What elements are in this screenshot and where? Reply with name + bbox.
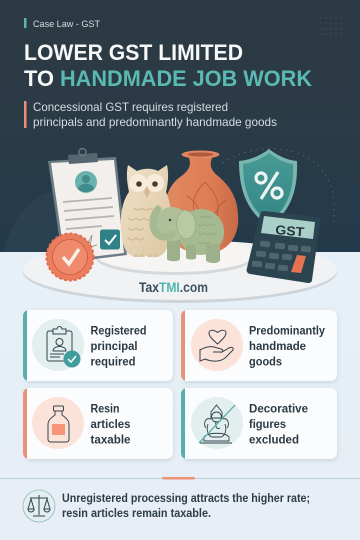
footer divider bbox=[0, 477, 360, 480]
background: dark header bbox=[0, 0, 360, 253]
dotted arc around shield bbox=[223, 149, 334, 225]
card: registered principal: required bbox=[90, 354, 136, 368]
platform upper tier bbox=[96, 238, 254, 275]
card: resin articles taxable bbox=[23, 388, 173, 459]
card: resin articles taxable: taxable bbox=[90, 432, 131, 446]
illustration: clipboard bbox=[48, 148, 127, 263]
card: predominantly handmade goods: Predominantly bbox=[249, 324, 325, 338]
footer takeaway text: Unregistered processing attracts the higher rate; bbox=[62, 491, 310, 505]
title: HANDMADE JOB WORK bbox=[60, 66, 313, 91]
card: predominantly handmade goods: handmade bbox=[249, 339, 306, 353]
icon: clipboard with person bbox=[47, 326, 72, 361]
illustration: GST calculator bbox=[247, 211, 320, 283]
card: registered principal bbox=[23, 310, 173, 381]
title: LOWER GST LIMITED bbox=[24, 40, 243, 65]
icon: hand with heart bbox=[200, 330, 233, 361]
icon: scales of justice bbox=[23, 490, 55, 522]
title bbox=[24, 40, 313, 91]
subtitle: principals and predominantly handmade goods bbox=[33, 115, 277, 129]
illustration: orange check badge bbox=[46, 234, 94, 280]
decorative arc behind clipboard bbox=[4, 190, 62, 252]
icon: resin bottle bbox=[48, 406, 69, 442]
illustration: vase bbox=[164, 150, 238, 254]
card: decorative figures excluded: Decorative bbox=[249, 402, 308, 416]
card: predominantly handmade goods: goods bbox=[249, 354, 282, 368]
subtitle bbox=[24, 100, 277, 129]
card: registered principal: Registered bbox=[90, 324, 146, 338]
card: decorative figures excluded bbox=[181, 388, 337, 459]
card: resin articles taxable: articles bbox=[90, 417, 131, 431]
card: predominantly handmade goods bbox=[181, 310, 337, 381]
illustration: owl bbox=[121, 165, 171, 257]
footer takeaway text bbox=[62, 491, 310, 520]
platform base bbox=[23, 240, 337, 303]
background: light lower section bbox=[0, 252, 360, 540]
card: decorative figures excluded: excluded bbox=[249, 432, 299, 446]
card: registered principal: principal bbox=[90, 339, 138, 353]
TaxTMI logo: TaxTMI.com bbox=[139, 280, 208, 295]
footer takeaway text: resin articles remain taxable. bbox=[62, 506, 211, 520]
category label: Case Law - GST bbox=[33, 19, 100, 29]
dot grid decoration bbox=[320, 17, 342, 35]
illustration: GST calculator: GST bbox=[275, 222, 305, 240]
illustration: percent shield bbox=[239, 149, 297, 226]
card: resin articles taxable: Resin bbox=[90, 402, 120, 416]
title: TO bbox=[24, 66, 54, 91]
subtitle: Concessional GST requires registered bbox=[33, 100, 228, 114]
icon: crossed-out figure bbox=[199, 405, 235, 443]
illustration: elephant bbox=[153, 207, 224, 263]
card: decorative figures excluded: figures bbox=[249, 417, 286, 431]
